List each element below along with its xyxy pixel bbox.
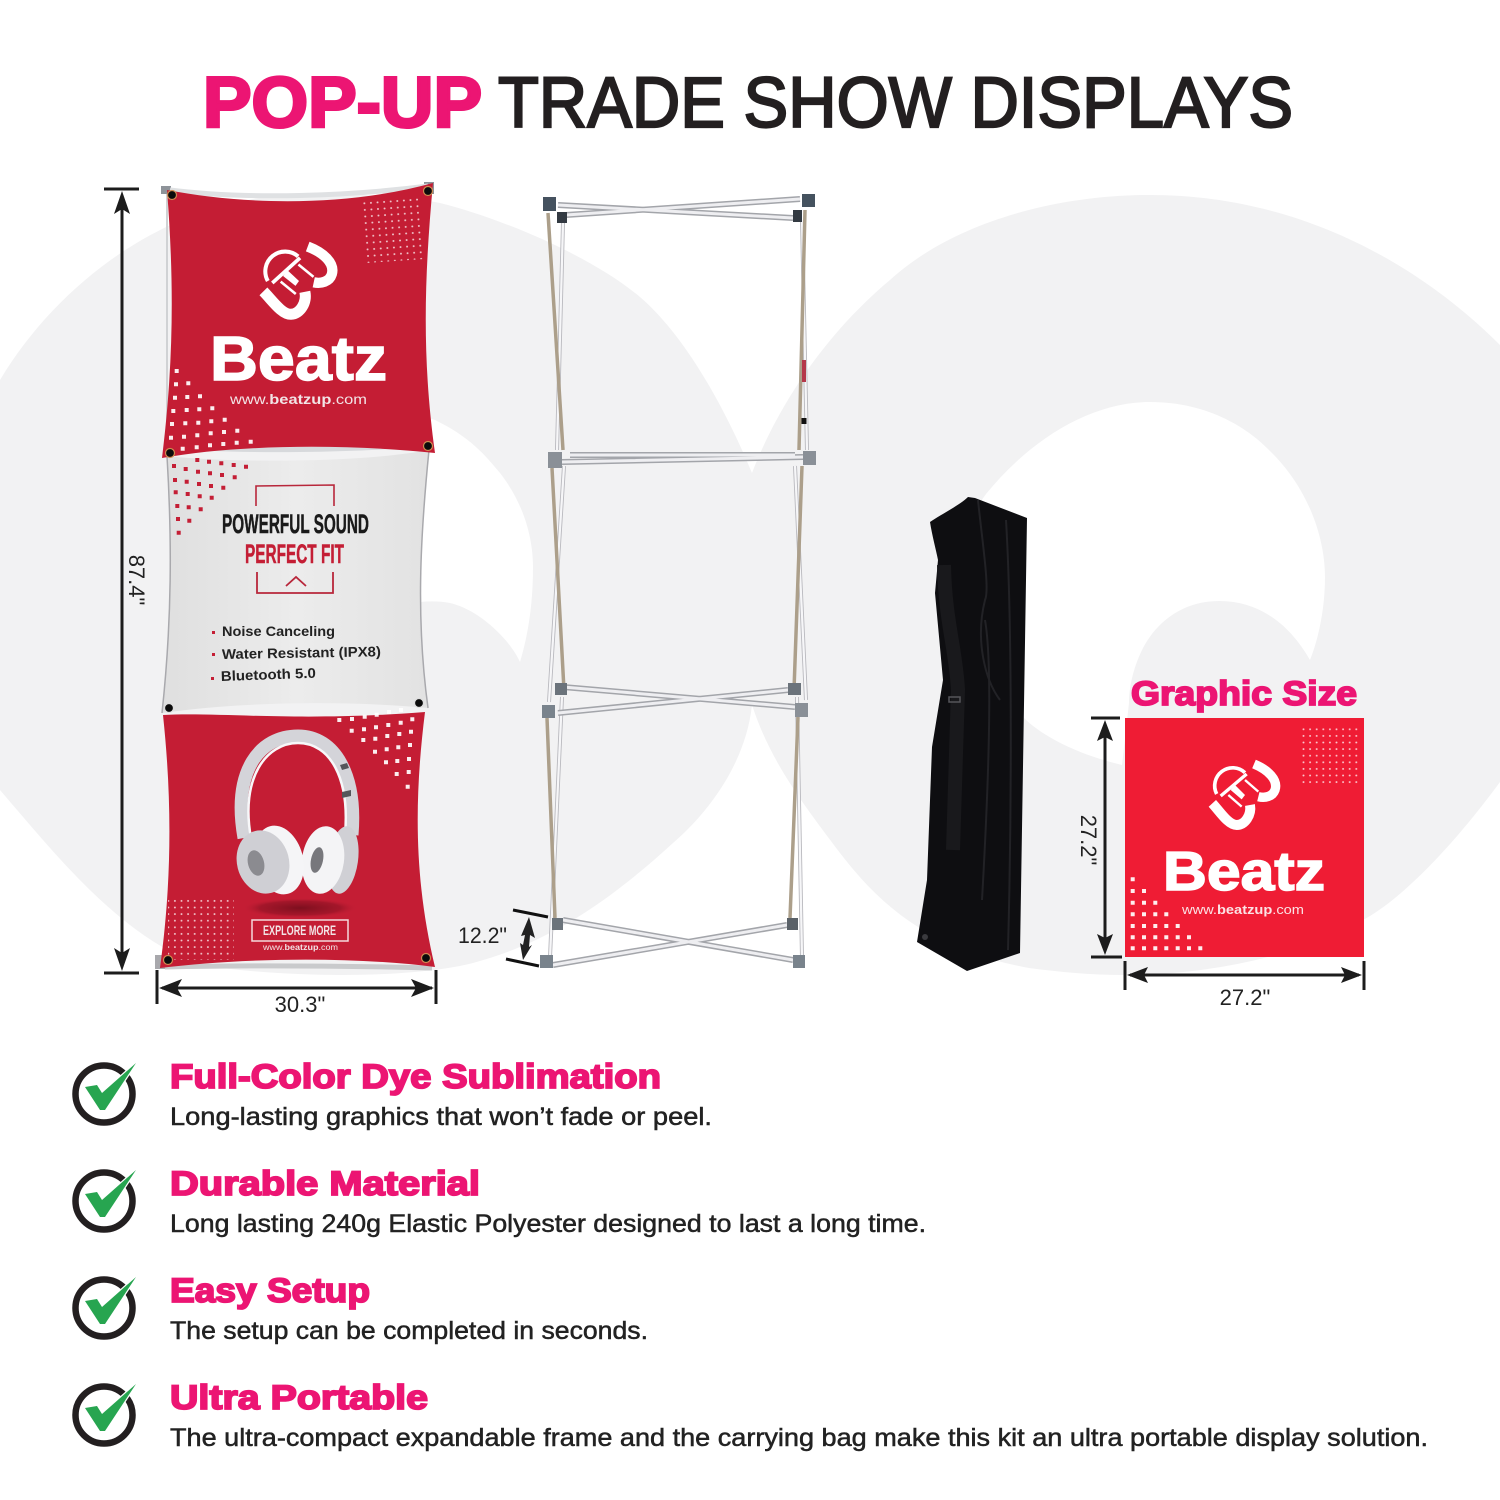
title: POP-UP xyxy=(203,64,482,143)
feature bullets: Bluetooth 5.0 xyxy=(221,665,316,684)
white square dots xyxy=(337,708,414,789)
heading: powerful sound: POWERFUL SOUND xyxy=(222,509,369,539)
carrying bag xyxy=(917,497,1027,971)
bag strap xyxy=(944,565,958,850)
heading: Ultra Portable xyxy=(170,1379,428,1417)
floating shadow xyxy=(242,898,358,918)
headphones xyxy=(230,736,363,900)
brand url: www. beatzup .com xyxy=(229,391,367,407)
frame silver pole highlights xyxy=(549,220,807,957)
panel: red top graphic xyxy=(162,183,435,458)
panel: flat graphic sample xyxy=(1125,718,1364,957)
fine dot field xyxy=(1300,725,1360,784)
heading: perfect fit: PERFECT FIT xyxy=(245,539,344,569)
graphic width dimension: 27.2 inches: 27.2" xyxy=(1220,985,1270,1010)
frame corner joints xyxy=(540,194,816,968)
grommets xyxy=(164,186,432,964)
fine dot field xyxy=(168,897,234,960)
white square dots xyxy=(169,369,253,451)
frame bracket bottom with chevron xyxy=(257,572,333,593)
width dimension: 30.3 inches: 30.3" xyxy=(275,992,325,1017)
graphic height dimension: 27.2 inches: 27.2" xyxy=(1076,815,1101,865)
feature: durable material xyxy=(76,1165,926,1238)
brand url: www.beatzup.com xyxy=(262,942,338,952)
graphic size heading: Graphic Size xyxy=(1131,675,1357,713)
white square dots xyxy=(1131,877,1202,950)
brand name: Beatz xyxy=(1163,840,1325,902)
frame pieces behind graphics xyxy=(155,182,434,969)
red square dots xyxy=(172,458,248,535)
icon: check xyxy=(76,1384,136,1444)
icon: check xyxy=(76,1063,136,1122)
feature bullets xyxy=(211,623,381,684)
description: Long lasting 240g Elastic Polyester designed to last a long time. xyxy=(170,1210,926,1238)
panel side edges xyxy=(162,450,429,713)
feature: easy setup xyxy=(76,1272,648,1345)
logo xyxy=(262,246,334,315)
strap buckle xyxy=(949,697,960,702)
description: The setup can be completed in seconds. xyxy=(170,1317,648,1345)
brand url: www. beatzup .com xyxy=(1181,902,1304,917)
frame silver poles xyxy=(549,220,807,957)
heading: Easy Setup xyxy=(170,1272,370,1310)
icon: check xyxy=(76,1277,136,1336)
height dimension: 87.4 inches xyxy=(104,189,149,973)
width dimension: 30.3 inches xyxy=(157,970,436,1017)
frame bar highlights xyxy=(553,199,803,965)
feature bullets: Noise Canceling xyxy=(222,623,335,639)
description: Long-lasting graphics that won’t fade or peel. xyxy=(170,1103,712,1131)
panel: assembled display with three graphics xyxy=(155,182,435,969)
feature list xyxy=(76,1058,1428,1452)
logo xyxy=(1212,764,1276,825)
feature bullets: Water Resistant (IPX8) xyxy=(222,643,381,662)
feature: ultra portable xyxy=(76,1379,1428,1452)
brand name: Beatz xyxy=(210,325,387,394)
frame depth dimension: 12.2 inches: 12.2" xyxy=(458,923,507,948)
bag eyelet xyxy=(922,934,928,940)
explore more button xyxy=(252,920,348,941)
graphic height dimension: 27.2 inches xyxy=(1076,718,1122,957)
frame bracket top xyxy=(256,485,334,506)
panel: pop-up frame xyxy=(540,194,816,968)
explore more button: EXPLORE MORE xyxy=(263,922,336,938)
panel: white middle graphic xyxy=(162,450,429,713)
graphic width dimension: 27.2 inches xyxy=(1125,961,1364,1010)
heading: Durable Material xyxy=(170,1165,480,1203)
heading: Full-Color Dye Sublimation xyxy=(170,1058,661,1096)
icon: check xyxy=(76,1170,136,1230)
description: The ultra-compact expandable frame and the carrying bag make this kit an ultra portable display solution. xyxy=(170,1424,1428,1452)
frame red marker xyxy=(802,360,806,382)
fine dot field xyxy=(362,198,426,263)
frame tan poles xyxy=(547,210,805,918)
background watermark shapes xyxy=(0,194,1500,975)
height dimension: 87.4 inches: 87.4" xyxy=(124,555,149,605)
frame black marker xyxy=(802,418,806,424)
bag folds xyxy=(978,500,1011,950)
frame horizontal bars xyxy=(553,199,803,965)
panel: red bottom graphic with headphones xyxy=(160,708,435,968)
feature: full-color dye sublimation xyxy=(76,1058,712,1131)
frame depth dimension: 12.2 inches xyxy=(458,910,548,966)
title: TRADE SHOW DISPLAYS xyxy=(498,64,1293,143)
